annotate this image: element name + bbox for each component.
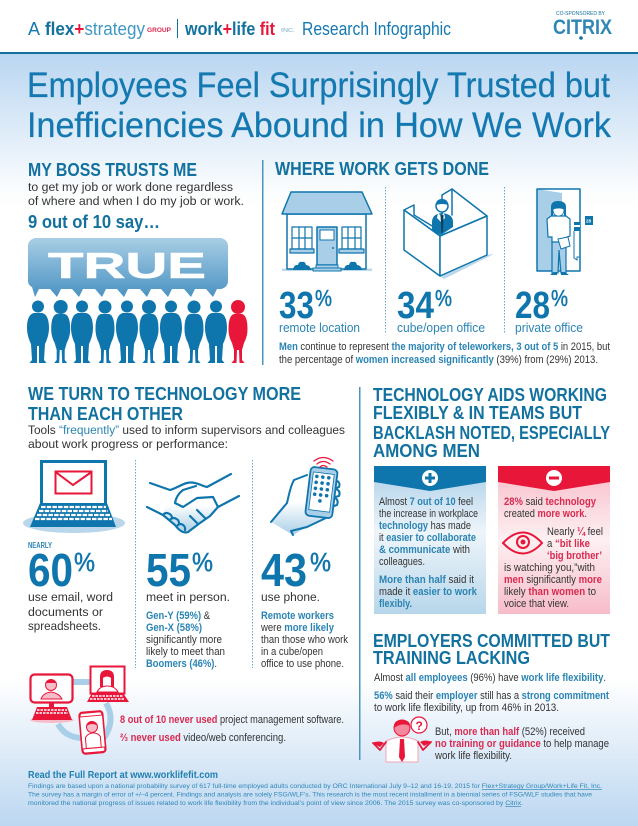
stat: 43% use phone xyxy=(260,544,349,670)
icon: shrugging man with question: ? xyxy=(416,719,423,733)
stat: 28% private office: % xyxy=(551,285,568,311)
stat: 34% cube/open office: % xyxy=(435,285,452,311)
stat: 43% use phone: 43 xyxy=(261,544,307,596)
stat: 28% private office: private office xyxy=(515,320,583,335)
stat: 55% meet in person: likely to meet than xyxy=(146,646,225,658)
text: never used stats xyxy=(120,714,344,744)
card: plus side xyxy=(374,466,486,614)
logo line: flex+strategy group and work+life fit: flex+strategy xyxy=(45,18,146,39)
heading: employers committed but training lacking: EMPLOYERS COMMITTED BUT xyxy=(373,631,610,651)
stat: nearly 60% xyxy=(28,541,113,633)
text: employer commitment: 56% said their employer still has a strong commitment xyxy=(374,690,609,702)
title: Employees Feel Surprisingly Trusted but xyxy=(27,66,610,105)
text: minus side copy: is watching you,”with xyxy=(504,562,595,574)
text: employer commitment xyxy=(374,672,609,714)
stat: 43% use phone: office to use phone. xyxy=(261,658,344,670)
heading: where work gets done: WHERE WORK GETS DONE xyxy=(275,159,489,179)
card: minus side xyxy=(498,466,610,614)
icon: handshake xyxy=(147,474,239,532)
co-sponsor: Citrix: CITRIX xyxy=(553,16,612,39)
icon: plus xyxy=(422,470,438,486)
stat: 43% use phone: % xyxy=(310,547,331,577)
text: employer commitment: Almost all employees (96%) have work life flexibility. xyxy=(374,672,606,684)
text: minus side copy xyxy=(504,496,603,610)
stat: 28% private office: 28 xyxy=(515,285,550,327)
text: boss trust description: to get my job or work done regardless xyxy=(28,180,233,194)
footer: report link and methodology xyxy=(28,769,602,807)
stat: nearly 60%: spreadsheets. xyxy=(28,619,101,633)
stat: nearly 60%: 60 xyxy=(28,544,73,596)
stat: 55% meet in person: Boomers (46%). xyxy=(146,658,217,670)
stat: 55% meet in person xyxy=(146,544,230,670)
people row: nine blue and one red xyxy=(27,300,248,363)
text: tools intro: about work progress or performance: xyxy=(28,437,228,451)
stat: 43% use phone: in a cube/open xyxy=(261,646,323,658)
heading: we turn to technology more than each other xyxy=(28,384,301,424)
heading: technology aids working flexibly xyxy=(373,385,610,461)
icon: minus xyxy=(546,470,562,486)
icon: house xyxy=(282,192,372,271)
text: never used stats: ⅔ never used video/web conferencing. xyxy=(120,732,286,744)
heading: we turn to technology more than each other: THAN EACH OTHER xyxy=(28,404,183,424)
text: plus side copy: made it easier to work xyxy=(379,586,477,598)
stat: 34% cube/open office: 34 xyxy=(397,285,434,327)
logo line: flex+strategy group and work+life fit: GROUP xyxy=(147,27,172,34)
text: minus side copy: likely than women to xyxy=(504,586,596,598)
icon: eye xyxy=(503,532,542,554)
text: no training callout: But, more than half (52%) received xyxy=(435,726,585,738)
heading: technology aids working flexibly: TECHNOLOGY AIDS WORKING xyxy=(373,385,607,405)
text: employer commitment: to work life flexibility, up from 46% in 2013. xyxy=(374,702,559,714)
text: plus side copy: colleagues. xyxy=(379,556,425,568)
stat: 33% remote location: 33 xyxy=(279,285,314,327)
footer: report link and methodology: Read the Full Report at www.worklifefit.com xyxy=(28,769,218,781)
text: plus side copy: & communicate with xyxy=(379,544,470,556)
title: Inefficiencies Abound in How We Work xyxy=(27,106,611,145)
panel: employers committed xyxy=(372,631,610,762)
stat: 55% meet in person: % xyxy=(192,547,213,577)
heading: employers committed but training lacking xyxy=(373,631,610,668)
text: plus side copy: More than half said it xyxy=(379,574,474,586)
stat: nearly 60%: NEARLY xyxy=(28,541,52,550)
text: boss trust description xyxy=(28,180,244,208)
text: no training callout: work life flexibility. xyxy=(434,750,512,762)
panel: we turn to technology xyxy=(23,384,349,754)
icon: cubicle with man xyxy=(404,189,494,279)
text: teleworker note xyxy=(279,341,610,366)
text: no training callout xyxy=(434,726,609,762)
text: plus side copy: flexibly. xyxy=(379,598,412,610)
co-sponsor: Citrix: CO-SPONSORED BY xyxy=(556,11,605,17)
header band xyxy=(0,0,638,54)
stat: 43% use phone: were more likely xyxy=(260,622,334,634)
footer: report link and methodology: Findings are based upon a national probability survey of 617 full-time employed adults conducted by ORC International July 9–12 and 16-19, 2015 for Flex+Strategy Group/Work+Life Fit, Inc. xyxy=(28,783,602,790)
text: minus side copy: created more work. xyxy=(504,508,587,520)
text: boss trust description: of where and when I do my job or work. xyxy=(28,194,244,208)
stat: 34% cube/open office: cube/open office xyxy=(397,320,485,335)
text: minus side copy: Nearly ¼ feel xyxy=(547,526,603,538)
stat: 43% use phone: use phone. xyxy=(261,590,320,604)
heading: technology aids working flexibly: AMONG MEN xyxy=(373,441,480,461)
stat: 55% meet in person: Gen-Y (59%) & xyxy=(146,610,210,622)
heading: we turn to technology more than each other: WE TURN TO TECHNOLOGY MORE xyxy=(28,384,301,404)
text: minus side copy: men significantly more xyxy=(504,574,602,586)
text: plus side copy: technology has made xyxy=(379,520,471,532)
stat: nearly 60%: documents or xyxy=(28,605,103,619)
stat: 33% remote location: remote location xyxy=(279,320,360,335)
panel: where work gets done xyxy=(275,159,610,366)
text: never used stats: 8 out of 10 never used project management software. xyxy=(120,714,344,726)
logo line: flex+strategy group and work+life fit: Research Infographic xyxy=(302,18,451,39)
logo line: flex+strategy group and work+life fit: work+life fit xyxy=(184,18,275,39)
stat: 34% cube/open office xyxy=(397,285,485,335)
text: teleworker note: the percentage of women increased significantly (39%) from (29%) 2013. xyxy=(279,354,598,366)
stat: 55% meet in person: meet in person. xyxy=(146,590,230,604)
text: tools intro: Tools “frequently” used to inform supervisors and colleagues xyxy=(28,423,345,437)
text: minus side copy: a “bit like xyxy=(547,538,590,550)
speech bubble: TRUE xyxy=(28,238,228,297)
panel: my boss trusts me xyxy=(27,160,248,363)
stat: nearly 60%: % xyxy=(74,547,95,577)
text: minus side copy: 28% said technology xyxy=(504,496,596,508)
speech bubble: TRUE: TRUE xyxy=(48,245,206,286)
stat: 55% meet in person: 55 xyxy=(146,544,191,596)
icon: video conferencing devices xyxy=(30,666,129,754)
heading: technology aids working flexibly: FLEXIBLY & IN TEAMS BUT xyxy=(373,403,582,423)
text: tools intro xyxy=(28,423,345,451)
stat: nearly 60%: use email, word xyxy=(28,590,113,604)
stat: 55% meet in person: Gen-X (58%) xyxy=(146,622,202,634)
stat: 33% remote location xyxy=(279,285,360,335)
footer: report link and methodology: The survey has a margin of error of +/–4 percent. Findings and analysis are solely FSG/WLF’s. This research is the most recent installment in a biennial series of FSG/WLF studies that have xyxy=(28,792,592,798)
text: plus side copy: Almost 7 out of 10 feel xyxy=(379,496,473,508)
stat: 43% use phone: Remote workers xyxy=(261,610,334,622)
panel: technology aids working flexibly xyxy=(373,385,610,614)
icon: private office door with woman: 28 xyxy=(586,218,592,224)
stat: 33% remote location: % xyxy=(315,285,332,311)
title xyxy=(27,66,611,145)
icon: laptop with email xyxy=(23,462,125,533)
logo line: flex+strategy group and work+life fit: A xyxy=(28,19,40,39)
stat: 55% meet in person: significantly more xyxy=(146,634,222,646)
text: plus side copy: it easier to collaborate xyxy=(379,532,476,544)
logo line: flex+strategy group and work+life fit: INC. xyxy=(281,28,296,34)
heading: employers committed but training lacking: TRAINING LACKING xyxy=(373,648,530,668)
heading: my boss trusts me: MY BOSS TRUSTS ME xyxy=(28,160,197,180)
icon: shrugging man with question xyxy=(372,717,432,762)
stat: 43% use phone: than those who work xyxy=(261,634,349,646)
logo line: flex+strategy group and work+life fit xyxy=(28,18,451,39)
text: plus side copy xyxy=(379,496,478,610)
text: teleworker note: Men continue to represent the majority of teleworkers, 3 out of 5 in 2015, but xyxy=(279,341,610,353)
icon: hand holding phone xyxy=(271,458,340,535)
icon: private office door with woman xyxy=(537,189,593,275)
text: no training callout: no training or guidance to help manage xyxy=(435,738,609,750)
text: plus side copy: the increase in workplace xyxy=(379,508,478,520)
stat: 28% private office xyxy=(515,285,583,335)
stat: 9 out of 10 say: 9 out of 10 say… xyxy=(28,212,160,232)
text: minus side copy: voice that view. xyxy=(504,598,569,610)
footer: report link and methodology: monitored the national progress of issues related to work life flexibility from the individual’s point of view since 2006. The 2015 survey was co-sponsored by Citrix. xyxy=(28,800,523,807)
text: minus side copy: ‘big brother’ xyxy=(547,550,602,562)
